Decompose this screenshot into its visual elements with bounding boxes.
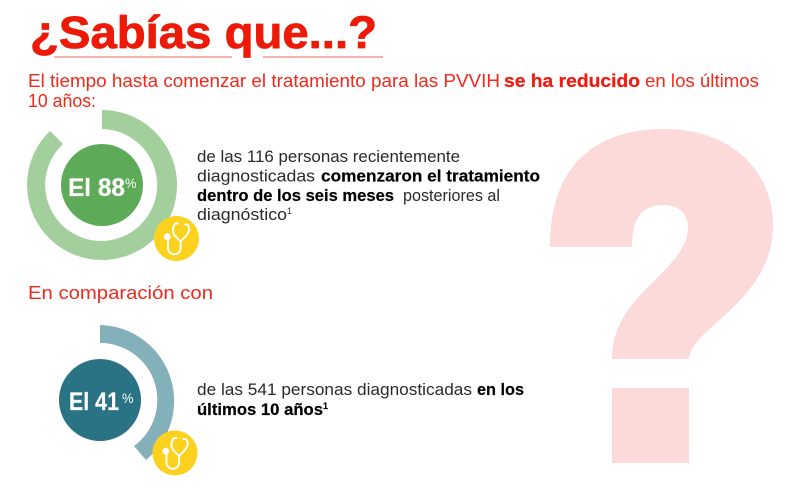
description: 541 people: 1: [323, 401, 328, 411]
description: 116 people: diagnóstico: [197, 206, 287, 224]
panel: 88 percent statistic: [27, 110, 540, 261]
badge: 41 percent: El 41: [69, 388, 119, 416]
icon: stethoscope: [152, 430, 198, 476]
description: 116 people: diagnosticadas: [197, 168, 315, 186]
badge: 88 percent: %: [125, 175, 136, 191]
intro text: en los últimos: [645, 70, 759, 91]
description: 541 people: de las 541 personas diagnosticadas: [197, 381, 472, 399]
description: 116 people: 1: [287, 206, 292, 216]
description: 116 people: comenzaron el tratamiento: [321, 168, 540, 186]
ring chart: 88 percent: [27, 110, 177, 260]
ring chart: 41 percent: [100, 325, 174, 460]
description: 116 people: [197, 148, 540, 224]
description: 116 people: dentro de los seis meses: [197, 187, 394, 205]
title: ¿Sabías que...?: [30, 7, 377, 58]
icon: stethoscope: [154, 216, 199, 261]
description: 541 people: en los: [477, 381, 524, 399]
comparison heading: En comparación con: [28, 282, 213, 303]
description: 541 people: [197, 381, 524, 419]
badge: 41 percent: %: [122, 390, 134, 406]
badge: 88 percent: El 88: [68, 174, 125, 202]
badge: 41 percent: [59, 359, 141, 441]
intro text: El tiempo hasta comenzar el tratamiento para las PVVIH: [28, 70, 500, 91]
description: 116 people: de las 116 personas recientemente: [197, 148, 460, 166]
description: 116 people: posteriores al: [403, 187, 500, 205]
panel: 41 percent statistic: [59, 325, 524, 476]
badge: 88 percent: [61, 144, 143, 226]
intro text: 10 años:: [28, 90, 96, 111]
intro text: [28, 70, 759, 111]
icon: large background question mark: [550, 129, 773, 463]
description: 541 people: últimos 10 años: [197, 401, 323, 419]
intro text: se ha reducido: [504, 70, 640, 91]
